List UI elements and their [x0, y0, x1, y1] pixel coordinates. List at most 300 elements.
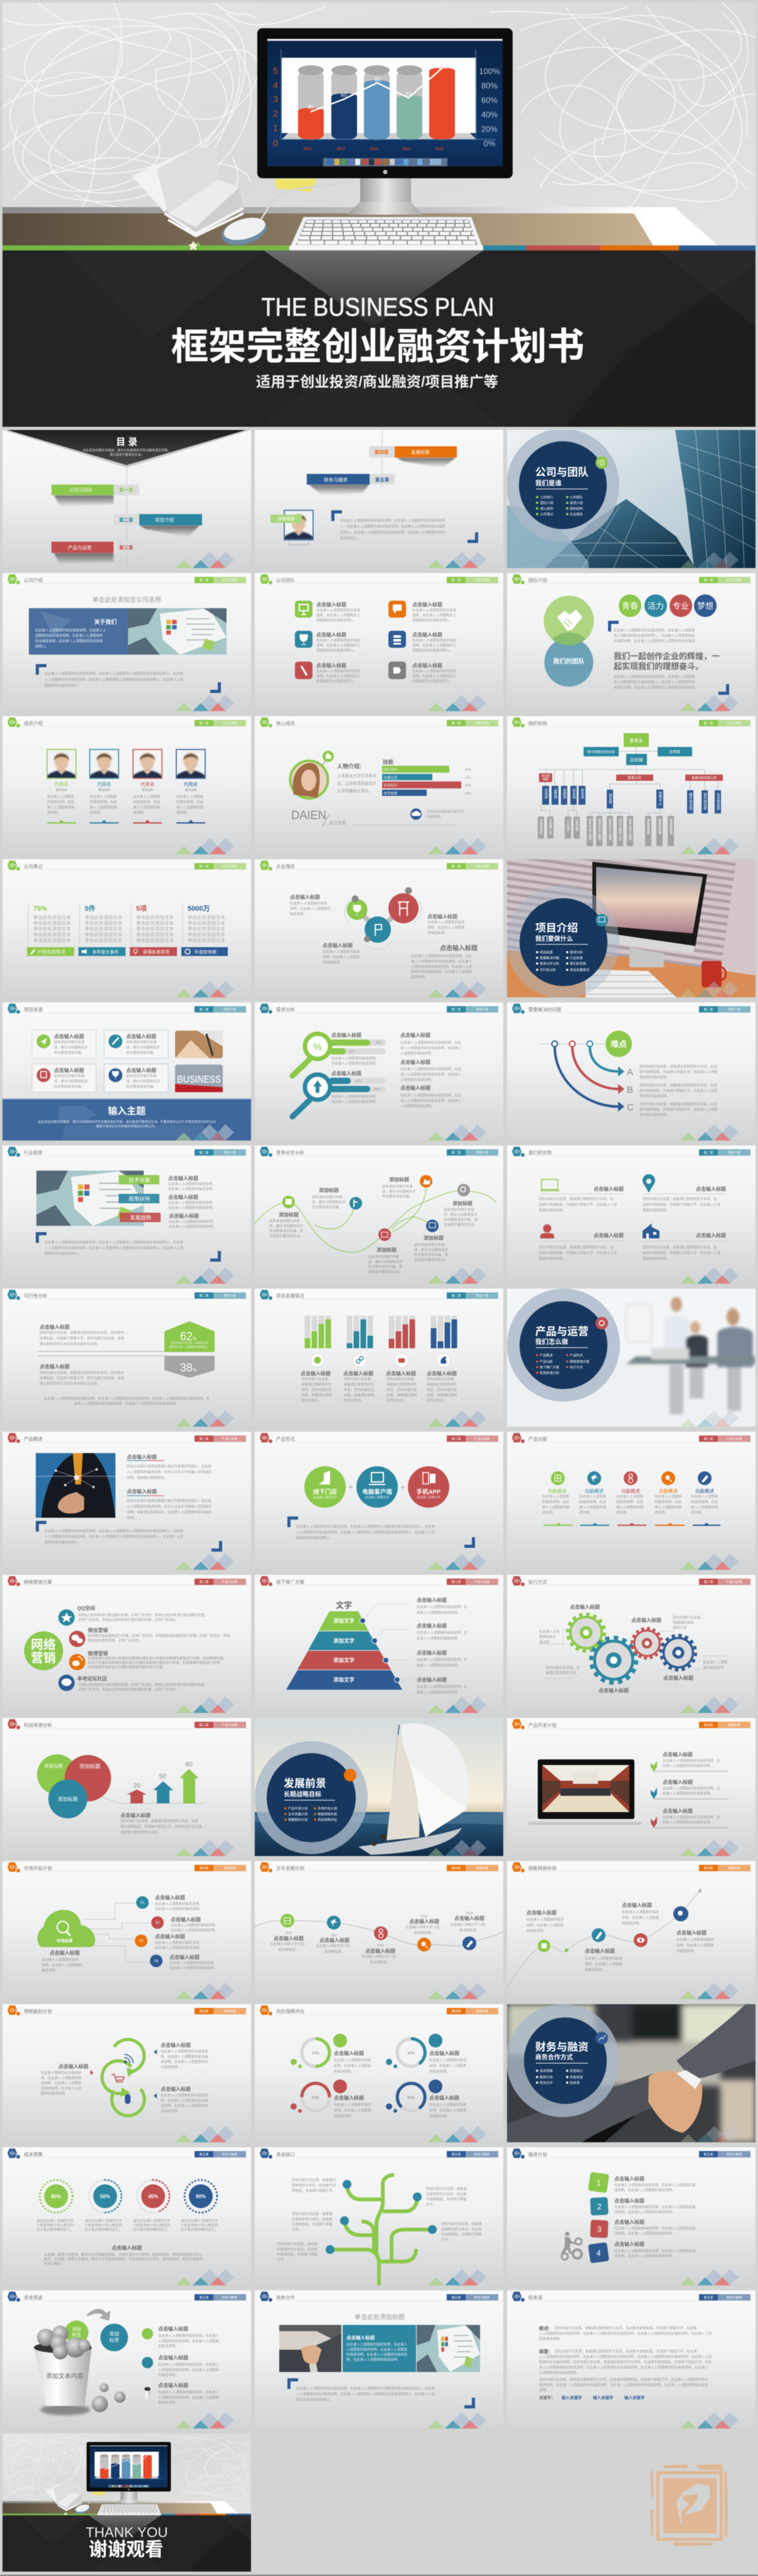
caption 1: 点击输入标题	[331, 1032, 361, 1038]
header: 产品与运营	[726, 1580, 742, 1584]
node 2020: 在此输入详细文字介绍，	[451, 1923, 488, 1927]
member 1	[47, 749, 76, 824]
text column: 上述图表的描述说明。	[400, 1051, 434, 1056]
item 4: 您的内容打在这里，	[427, 1378, 457, 1382]
feature 1: 功能概述	[548, 1488, 567, 1494]
wechat: 微信营销	[88, 1627, 108, 1633]
monitor chart axis labels	[273, 64, 500, 151]
section list: 产品功能	[540, 1359, 553, 1364]
plus: +	[400, 1482, 405, 1492]
node 2020: 2020	[466, 1912, 473, 1916]
org chart: 销部	[543, 777, 548, 781]
gauge 90: 90%	[196, 2194, 206, 2199]
chapter 4: 第四章	[375, 449, 389, 455]
chapter 4	[369, 446, 457, 468]
text 2: 说明，在此录入上述图表	[585, 1962, 622, 1967]
item B	[627, 1083, 718, 1098]
item 04: 在此录入上述图表的描述说明，	[169, 1962, 216, 1965]
node 2020: 和详细信息。	[459, 1928, 479, 1933]
panel: team intro	[507, 572, 755, 712]
header: 第二章	[199, 1007, 209, 1012]
step 1: 在此录入上述图表的描述说明，在此录入上述图表的描	[614, 2184, 695, 2187]
text 4: 描述说明。	[411, 975, 428, 980]
item 4: 点击输入标题	[412, 631, 442, 638]
text 3: 过复制您的文本后，在此框	[292, 2216, 333, 2221]
text block bottom	[614, 674, 729, 695]
header: 需要解决的问题	[528, 1006, 562, 1012]
caption 2: 在此录入上述图表的描述说明，	[331, 1095, 378, 1099]
monitor chart axis labels: 2011	[303, 148, 312, 151]
header: 公司团队	[276, 577, 295, 583]
text 4: 录入上述图表的综合描述说明，在此录入	[411, 958, 472, 963]
header: 利润来源分析	[24, 1722, 52, 1728]
header	[260, 1862, 503, 1872]
photo 2: BUSINESS	[177, 1073, 221, 1085]
text 5: 您的内容打在这里，或者通	[277, 2243, 318, 2246]
teal text panel	[343, 2325, 416, 2372]
funding tree	[326, 2175, 437, 2285]
text 1	[334, 2050, 371, 2074]
text 4: 说明，在此录入上述图表	[676, 1943, 714, 1948]
item 3	[144, 2382, 220, 2405]
text 1: 复制您的文本后，在此框中选	[292, 2183, 336, 2188]
name: 设计总监	[329, 820, 346, 825]
header: 产品功能	[528, 1436, 547, 1442]
bio: 大学传播硕士学位。	[337, 788, 373, 793]
summary: 概念，点击输入需要文字解说，解说文字尽量概括精炼，不用多余的文字修饰，描述精准的，解说内容能符	[44, 2257, 203, 2262]
text 1: 您将点击图片选择设置图片格式可更换您的图片，在此录	[127, 1465, 211, 1469]
note lower left: 者通过复制您的文本	[546, 1670, 577, 1675]
header: 项目介绍	[223, 1294, 236, 1298]
card 1: 此处添加详细文本描	[54, 1041, 85, 1044]
card 1: 符合整体语言风格。	[54, 1050, 85, 1055]
text 2: 在此录入上述图表的描述	[427, 921, 464, 925]
section list: 公司简介	[540, 495, 554, 500]
feature 2: 录入上述图表的描	[579, 1505, 607, 1510]
panel: corporate philosophy	[255, 859, 503, 998]
panel: project progress	[255, 1288, 503, 1427]
member 3: 代用名	[141, 781, 154, 787]
right text: 点击输入标题	[168, 1194, 198, 1200]
step 2: 2	[597, 2202, 602, 2211]
item 2: 的描述说明。	[158, 2373, 178, 2378]
feature 3: 录入上述图表的描	[616, 1505, 644, 1510]
circle 1: 点击输入说明文字	[313, 1495, 337, 1500]
header: 项目介绍	[476, 1007, 488, 1012]
text 2: 在此录入上述图表的描述	[585, 1957, 622, 1961]
org chart	[538, 733, 723, 846]
feature 5: 的描述说明。在此	[691, 1499, 718, 1504]
section title: 公司与团队	[535, 466, 589, 478]
donut 2: 40%	[407, 2052, 415, 2056]
item 6: 在此录入上述图表的综合描述	[412, 670, 456, 674]
monitor chart axis labels: 3	[273, 94, 278, 105]
item 3: 本后。您的内容打在	[387, 1387, 417, 1392]
pyramid	[286, 1601, 402, 1690]
feature 4: 录入上述图表的描	[654, 1505, 682, 1510]
summary: 合核心概念。	[44, 2261, 64, 2266]
header	[8, 717, 251, 727]
header: 第四章	[451, 1866, 461, 1870]
magnifier chart 2: 60%	[374, 1088, 381, 1092]
header: 第五章	[451, 2295, 461, 2300]
column 4: 单击此处添加文本	[188, 925, 225, 931]
item 04: 04	[154, 1960, 159, 1963]
captions: 请在此处输入详细的文字	[181, 2219, 218, 2223]
person with gears icon	[561, 2232, 582, 2260]
header: 第三章	[703, 1437, 713, 1441]
panel: section development prospects	[254, 1719, 504, 1857]
text 1: 择粘贴，并选择只保留文字。	[292, 2188, 336, 2193]
text block: 入上述图表的综合描述说明，在此录入上述图表的上述图表的综合描述说明入。在此录入上述	[296, 1530, 435, 1535]
member 2: 录入上述图表的描	[90, 805, 117, 810]
teal text panel: 上述图表的描述说明。在此录入上述图表	[346, 2347, 408, 2352]
node red: 添加标题	[376, 1247, 397, 1253]
chapter 3	[51, 542, 139, 564]
node 2019: 在此输入详细文字介绍，	[405, 1926, 443, 1929]
circle 2: 点击输入说明文字	[365, 1495, 389, 1500]
header: 产品与运营	[474, 1437, 490, 1441]
feature 5: 在此录入上述图表	[691, 1495, 718, 1499]
step 4	[588, 2241, 696, 2263]
text block: 在此录入上述图表的综合描述说明，在此录入上述图表的上述图表的综合描述说明入，在此录	[45, 672, 183, 676]
gauge 45: 45%	[148, 2194, 158, 2199]
text 1: 入上述图表的描述说明，也可以点击文字框输入您的描述	[127, 1469, 211, 1474]
circle 3: 点击输入说明文字	[417, 1495, 440, 1500]
header: 项目介绍	[223, 1007, 236, 1012]
text 1: 您的内容打在这里，或者通过复制您的文本后，在此框中	[40, 1331, 124, 1335]
text 3: 说明，在此录入上述图表	[622, 1915, 659, 1920]
item 4	[427, 1353, 457, 1403]
keywords	[539, 2395, 645, 2400]
arrow chart: 20	[133, 1783, 141, 1790]
header: 核心成员	[276, 720, 295, 726]
contents banner: 语言描述尽量简洁生动。	[109, 453, 144, 457]
skills chart: 业务知识	[383, 783, 398, 788]
feature 2: 在此录入上述图表	[579, 1495, 606, 1499]
icon cart	[112, 2074, 124, 2082]
text 4	[429, 2095, 467, 2118]
header	[260, 574, 503, 584]
abstract: 录入上述图表的综合描述说明，在此录入上述图表的综合描述说明，在此录入上述图表的综合描述说明，在此录入	[539, 2365, 708, 2370]
header: 产品概述	[24, 1436, 43, 1442]
column 3: 获得各类奖项	[143, 949, 169, 955]
monitor chart axis labels: 100	[437, 64, 447, 70]
text 2: 点击输入标题	[127, 1488, 157, 1495]
text 2: 点击输入标题	[429, 2050, 459, 2056]
org chart: 行政后勤	[575, 818, 579, 832]
feature 3: 述说明。	[616, 1510, 630, 1515]
captions: 介绍信息和介绍以便您的	[133, 2223, 170, 2228]
column 3: 单击此处添加文本	[136, 936, 174, 943]
section list: 组织结构	[570, 506, 583, 511]
header: 第五章	[703, 2152, 713, 2157]
section list: 网络营销方案	[570, 1359, 590, 1364]
photo: monitor on desk	[507, 830, 755, 1005]
header: 第四章	[703, 1866, 713, 1870]
header: 第五章	[199, 2295, 209, 2300]
header: 第二章	[703, 1151, 713, 1155]
pyramid: 添加文字	[333, 1618, 355, 1624]
header: 第五章	[451, 2152, 461, 2157]
text 2: 过复制您的文本后，在此框	[426, 2191, 467, 2196]
section list: 公司团队	[570, 495, 584, 500]
text block: 描述说明入。	[340, 536, 360, 541]
org chart: 市场营	[542, 775, 550, 778]
bio: 上海复旦大学哲学系毕	[337, 774, 376, 778]
node teal: 此处添加详细文本描	[312, 1196, 343, 1199]
member 4: 职位名称	[185, 788, 196, 792]
text block: 图表的综合描述说明入。	[296, 1535, 333, 1540]
node blue	[414, 1220, 449, 1262]
note lower left: 您的内容打在这里，或	[546, 1666, 580, 1670]
text column: 录入上述图表的综合描述说明，在此录入	[400, 1072, 462, 1077]
text column: 点击输入标题	[400, 1085, 430, 1091]
leader photo	[270, 510, 313, 545]
keyword circles: 专业	[673, 601, 689, 611]
wave lines	[255, 1186, 496, 1252]
item 2: 上述图表的描述说明，在此录入上述图表	[158, 2367, 220, 2372]
step 3	[590, 2219, 696, 2238]
gauge 90	[184, 2180, 217, 2213]
node 2017: 和详细信息。	[324, 1949, 344, 1954]
right text 2: 明，在此录入上述图表的综合描	[161, 2098, 208, 2103]
section circle	[507, 1289, 620, 1402]
node 2016: 和详细信息。	[279, 1947, 299, 1952]
text block	[36, 1232, 221, 1262]
bio: 人物介绍:	[337, 763, 361, 770]
advantage 3: 图表的描述说明。	[539, 1256, 566, 1261]
item 5	[295, 662, 361, 684]
item 5: 说明，在此录入上述图表的上	[316, 674, 361, 679]
advantage 2: 您的内容打在这里，或者通过复制您的文本后，在	[643, 1198, 717, 1201]
note top right: 您的文本	[673, 1625, 687, 1630]
item 1: 点击输入标题	[316, 601, 346, 608]
org chart: 董事会	[630, 738, 643, 743]
text 2: 在此录入上述图表的描述说明，在	[417, 1631, 467, 1635]
text 1: 点击输入标题	[526, 1909, 557, 1916]
item 1: 点击输入标题	[158, 2326, 188, 2332]
column 2: 单击此处添加文本	[85, 931, 122, 937]
header: 第二章	[199, 1294, 209, 1298]
gear headings: 点击输入标题	[599, 1687, 629, 1693]
note top right: 您的内容打在这里，	[673, 1616, 704, 1620]
item B: B	[627, 1085, 633, 1095]
photo handshake	[279, 2325, 341, 2372]
item 01: 01	[141, 1901, 145, 1905]
text 3	[417, 1650, 467, 1668]
header: 第四章	[199, 2009, 209, 2014]
circle 1	[304, 1466, 346, 1508]
header: 项目来源	[24, 1007, 43, 1012]
gear headings: 点击输入标题	[663, 1675, 693, 1681]
text block bottom: 的上述图表的综合描述说明入。在此录入上述图表的综	[614, 679, 695, 684]
theme band: 此处添加详细文本描述，建议与标题相关并符合整体语言风格，语言描述尽量简洁生动。尽量将每页幻灯片字数控制在200字以内	[38, 1120, 216, 1124]
item 1: 点击输入标题	[663, 1751, 693, 1758]
note left: 在此录入上述	[539, 1630, 559, 1634]
text 1: 通过复制您的文本后您的内容打在这里。	[40, 1341, 100, 1346]
item 2	[343, 1353, 375, 1403]
member 1: 述说明。	[47, 810, 61, 815]
portrait	[290, 751, 334, 798]
text 2	[40, 1363, 124, 1386]
right text 2	[154, 2086, 208, 2113]
chapter 1: 公司与团队	[69, 487, 93, 493]
org chart: 市场推广员	[548, 818, 552, 835]
text column: 上述图表的描述说明。	[400, 1103, 434, 1108]
header: 财务与融资	[474, 2152, 490, 2157]
header: 公司与团队	[474, 721, 490, 726]
text 1: 在此录入上述图表的描述	[334, 2059, 371, 2063]
node green: 此处添加详细文本描	[269, 1220, 300, 1223]
header	[512, 2149, 755, 2159]
item 1	[651, 1751, 729, 1772]
gauge 50	[89, 2180, 122, 2213]
node grey	[444, 1184, 478, 1227]
text 1	[127, 1454, 211, 1480]
header: 公司事记	[24, 863, 43, 869]
column 2: 单击此处添加文本	[85, 915, 122, 920]
text column: 录入上述图表的综合描述说明，在此录入	[400, 1098, 462, 1103]
forum	[58, 1675, 207, 1692]
column 1: 单击此处添加文本	[33, 936, 71, 943]
right text 2: 合描述说明。	[161, 2108, 181, 2113]
item 1: 本后。您的内容打在	[301, 1387, 332, 1392]
step 1: 点击输入标题	[614, 2176, 644, 2182]
member 1: 的描述说明。在此	[47, 800, 75, 805]
photo: meeting	[507, 1289, 755, 1427]
text 4: 过复制您的文本后，在此框	[441, 2226, 482, 2231]
cloud	[38, 1910, 95, 1947]
section list: 可行性分析	[540, 967, 556, 972]
text 4: 的描述说明。	[676, 1948, 697, 1953]
header: 第二章	[703, 1007, 713, 1012]
donut 3	[291, 2080, 347, 2113]
item 1: 在此录入上述图表的综合描述说明，在	[663, 1759, 720, 1763]
monitor chart axis labels: 2	[273, 109, 278, 119]
62 percent shape: 62%	[180, 1330, 196, 1343]
item 3: 点击输入标题	[663, 1808, 693, 1814]
feature 3: 功能概述	[621, 1488, 640, 1494]
node teal: 添加标题	[319, 1187, 339, 1193]
step 2	[590, 2197, 696, 2216]
section list: 需要解决问题	[540, 955, 559, 960]
text 2: 您的内容打在这里，或者通	[426, 2187, 467, 2191]
node 2017: 2017	[331, 1934, 338, 1938]
monitor chart axis labels: 100%	[479, 67, 500, 76]
org chart: 营销中心	[658, 791, 662, 805]
forum: 达到广告目的。利用QQ空间来进行朋友圈的传播，达到广告目的。	[78, 1687, 178, 1692]
panel: section finance	[506, 2004, 756, 2143]
column 3: 5项	[136, 904, 147, 913]
node 2018: 和详细信息。	[370, 1960, 390, 1965]
text 3: 中选择粘贴，并选择只保留	[292, 2222, 333, 2227]
node blue: 添加标题	[424, 1235, 444, 1241]
card 2: 此处添加详细文本描	[126, 1041, 157, 1044]
theme band: 输入主题	[108, 1105, 146, 1117]
item 4: 这里，或者通过复制	[427, 1392, 457, 1397]
text block	[120, 1812, 205, 1835]
magnifier chart 2	[292, 1075, 386, 1117]
header: 产品开发计划	[528, 1722, 557, 1728]
skills chart: 领导管理	[383, 791, 398, 796]
feature 3: 的描述说明。在此	[616, 1499, 644, 1504]
item 2: 您的文本后。	[344, 1398, 364, 1403]
chapter 5: 财务与融资	[324, 476, 348, 483]
column 2: 5件	[85, 904, 95, 913]
item 1: 的描述说明。	[158, 2344, 178, 2349]
item B: 表的综合描述说明。	[639, 1093, 670, 1098]
node grey: 述，建议与标题相关并	[444, 1212, 478, 1217]
text 4: 点击输入标题	[440, 944, 478, 952]
header: 结束语	[528, 2294, 543, 2300]
captions: 请在此处输入详细的文字	[85, 2219, 122, 2223]
card 1	[32, 1030, 96, 1058]
theme band	[3, 1098, 251, 1140]
gear headings: 点击输入标题	[570, 1604, 600, 1610]
section title: 财务与融资	[535, 2041, 589, 2053]
header: 销售网络布局	[528, 1865, 557, 1871]
section list: 结束语	[570, 2080, 580, 2085]
gauge 45	[137, 2180, 169, 2213]
note top right: 或者通过复制	[673, 1620, 693, 1625]
header: 公司与团队	[726, 578, 742, 582]
header: 第一章	[199, 864, 209, 869]
item A: A	[627, 1067, 633, 1078]
text block: 或者通过复制您的文本后。	[120, 1830, 161, 1835]
text 3: 的描述说明。	[323, 960, 343, 965]
keywords: 输入关键字	[624, 2395, 645, 2400]
item 3: 您的文本后。	[387, 1398, 407, 1403]
feature 2: 的描述说明。在此	[579, 1499, 607, 1504]
column 4: 单击此处添加文本	[188, 920, 225, 926]
monitor chart axis labels: 2013	[370, 148, 378, 151]
summary: 点击输入需要文字解说，解说文字尽量概括精炼，不用多余的文字修饰，描述精准的，解说内容能符合核心	[44, 2253, 203, 2257]
item 3: 的描述说明。	[158, 2400, 178, 2405]
text 2	[417, 1623, 467, 1641]
text 1: 说明，在此录入上述图表	[526, 1923, 564, 1928]
cup with balls: 标签	[72, 2332, 81, 2337]
node red: 言描述尽量简洁生动。	[368, 1269, 402, 1274]
panel: cost budget	[3, 2147, 251, 2286]
panel: profit sources	[3, 1717, 251, 1857]
right text 1: 点击输入标题	[161, 2042, 191, 2048]
item 04	[150, 1954, 216, 1970]
header: 我们的优势	[528, 1149, 552, 1156]
text 2: 点击输入标题	[427, 913, 457, 920]
captions: 含义表达更清晰的含义。	[133, 2227, 170, 2232]
header: 成员介绍	[24, 720, 43, 726]
header	[260, 1433, 503, 1443]
keyword circles: 活力	[648, 601, 664, 611]
item 2	[388, 601, 457, 623]
panel: execution	[507, 1574, 755, 1714]
item 1: 上述图表的描述说明，在此录入上述图表	[158, 2338, 220, 2343]
item C: 您的内容打在这里，或者通过复制您的文本后，在此	[639, 1103, 717, 1107]
item 1: 点击输入标题	[301, 1370, 331, 1377]
header: 可行性分析	[24, 1292, 48, 1299]
icon wifi	[124, 2054, 133, 2063]
item 1: 在此录入上述图表的综合描述	[316, 609, 360, 613]
text 4: 此录入上述图表的描述说明。	[417, 1690, 461, 1695]
pyramid: 添加文字	[333, 1677, 355, 1683]
magnifier chart 2: 40%	[355, 1080, 362, 1083]
org chart: 市场调研员	[539, 818, 543, 835]
header: 项目介绍	[476, 1294, 488, 1298]
section subtitle: 我们怎么做	[535, 1338, 568, 1346]
gauge 80: 80%	[51, 2194, 61, 2199]
header: 成本预算	[24, 2151, 43, 2157]
